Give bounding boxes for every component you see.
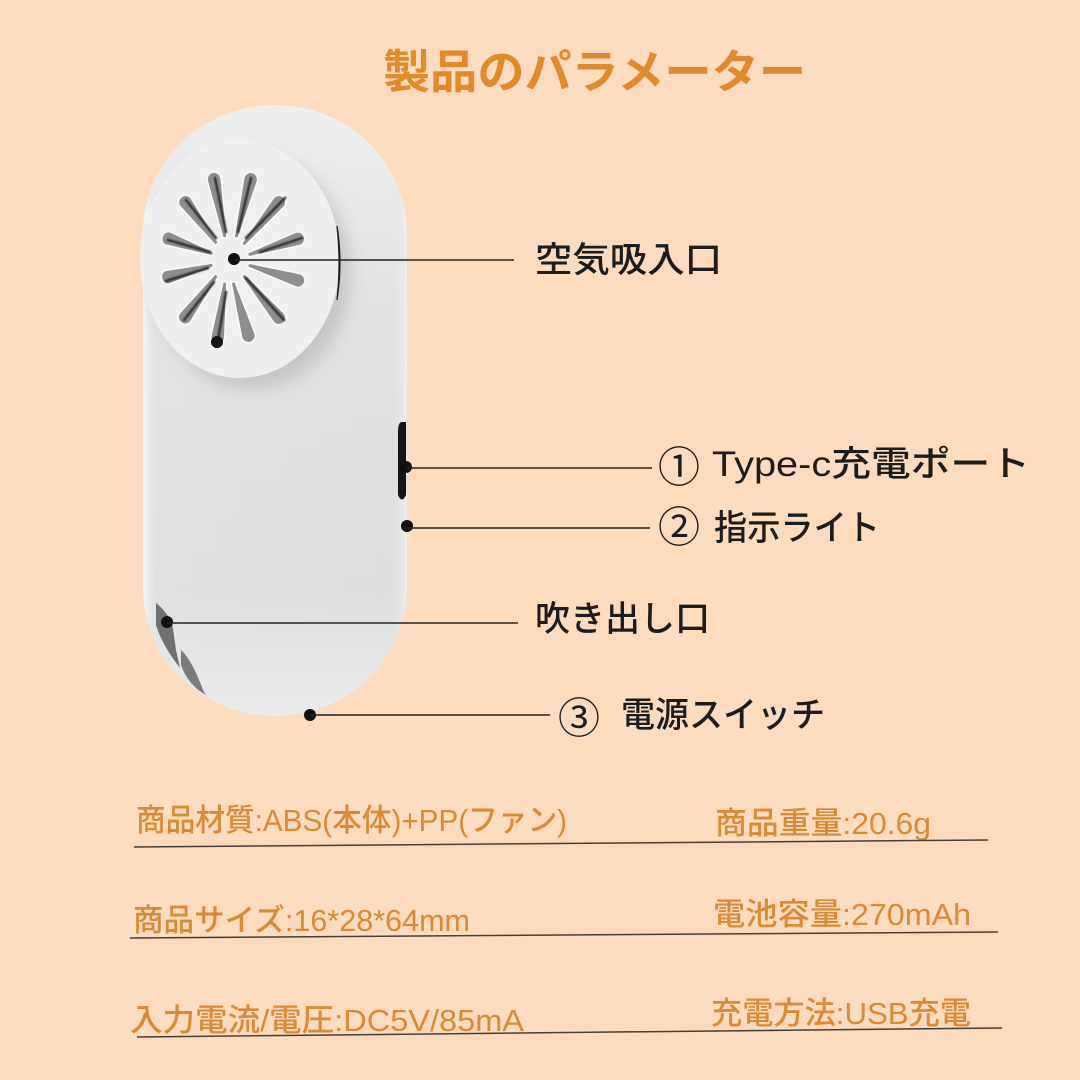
callout: indicator light: [401, 504, 880, 551]
bottom outlet vents: [156, 603, 180, 668]
spec row 2: 商品サイズ:16*28*64mm: [133, 903, 470, 938]
spec row 1: 商品材質:ABS(本体)+PP(ファン): [136, 803, 567, 838]
callout: air outlet: [161, 600, 710, 639]
slot inner shadows: [166, 178, 302, 340]
spec row 1: [134, 803, 988, 847]
callout: power switch: [304, 695, 825, 742]
side port slot: [398, 422, 406, 500]
device body: [143, 105, 407, 716]
callout: power switch: 電源スイッチ: [621, 696, 825, 735]
spec row 3: 充電方法:USB充電: [711, 996, 971, 1031]
disc shadow: [154, 156, 350, 388]
callout: indicator light: 指示ライト: [714, 509, 880, 548]
title: 製品のパラメーター: [383, 46, 806, 98]
spec row 3: [130, 996, 1002, 1038]
callout: air intake: [228, 241, 722, 280]
spec row 3: 入力電流/電圧:DC5V/85mA: [130, 1003, 524, 1038]
fan slots: [160, 171, 307, 345]
slot end dot: [211, 336, 223, 348]
spec row 2: [130, 897, 998, 938]
product: handheld fan illustration: [140, 105, 407, 716]
disc dark rim: [337, 226, 340, 300]
callout: air outlet: 吹き出し口: [535, 600, 710, 639]
callout: power switch: ③: [558, 695, 600, 742]
spec row 2: 電池容量:270mAh: [713, 897, 971, 932]
intake disc: [140, 140, 340, 378]
spec row 1: 商品重量:20.6g: [715, 806, 931, 841]
callout: Type-C port: Type-c充電ポート: [712, 445, 1030, 484]
callout: indicator light: ②: [658, 504, 700, 551]
callout: air intake: 空気吸入口: [535, 241, 722, 280]
callout: Type-C port: ①: [658, 444, 700, 491]
callout: Type-C port: [400, 444, 1030, 491]
